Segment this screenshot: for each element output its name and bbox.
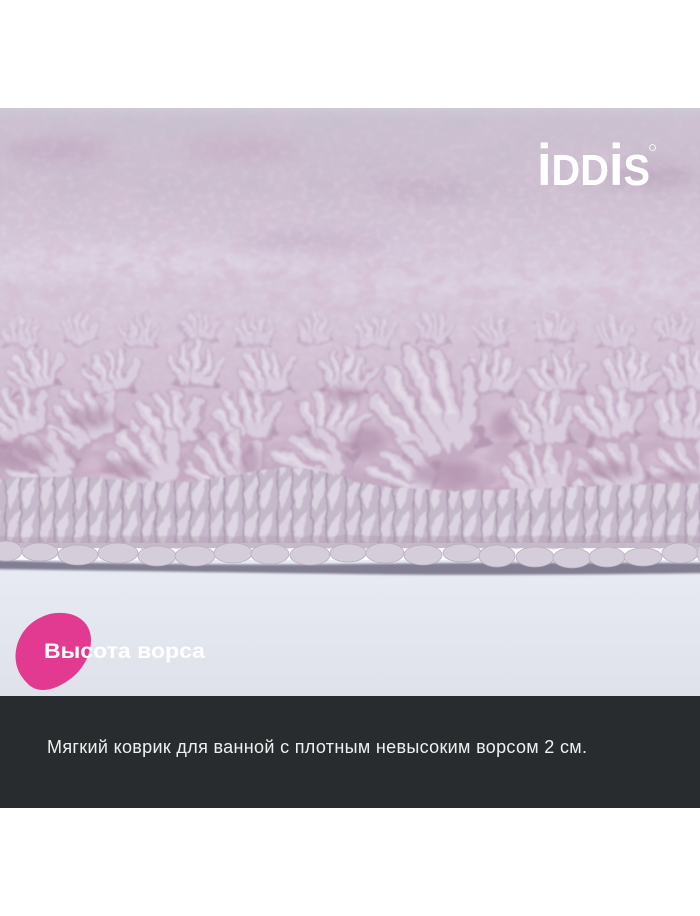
mat edge shadow (0, 560, 700, 575)
mat edge: braided rope (0, 468, 700, 548)
heading: Высота ворса (44, 640, 205, 663)
caption text: Мягкий коврик для ванной с плотным невысоким ворсом 2 см. (47, 737, 587, 757)
mat edge: stitched beads (0, 541, 700, 568)
logo: IDDIS: iDDiS (537, 133, 650, 198)
photo: bath mat pile (0, 108, 700, 531)
caption panel (0, 696, 700, 808)
fur shadow gaps (0, 387, 700, 486)
badge: pink blob (15, 613, 91, 690)
fur tufts (0, 312, 700, 531)
floor (0, 560, 700, 696)
